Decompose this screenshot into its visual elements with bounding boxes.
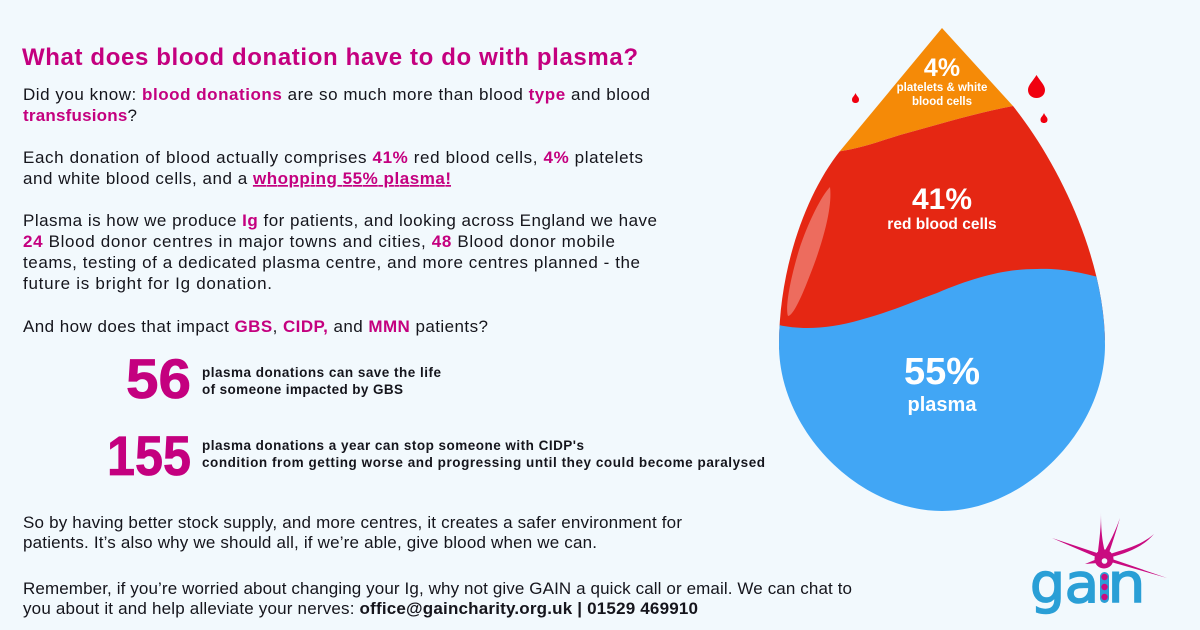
- label: 55%: [904, 351, 980, 416]
- logo: gain: a: [1065, 552, 1099, 615]
- icon: small blood droplet left: [852, 93, 859, 103]
- stat: 56 donations: of someone impacted by GBS: [202, 382, 403, 397]
- highlight: [787, 187, 830, 316]
- text block: plasma and Ig: [23, 211, 657, 293]
- text block: plasma and Ig: future is bright for Ig donation.: [23, 274, 272, 293]
- text block: stock supply: patients. It’s also why we should all, if we’re able, give blood when we can.: [23, 533, 597, 552]
- text block: composition of a donation: [23, 148, 643, 188]
- text block: contact: you about it and help alleviate your nerves: office@gaincharity.org.uk | 01529 469910: [23, 599, 698, 618]
- icon: small blood droplet right: [1040, 113, 1048, 123]
- logo: gain: [1030, 512, 1167, 615]
- text block: composition of a donation: and white blood cells, and a whopping 55% plasma!: [23, 169, 451, 188]
- label: 41%: [887, 183, 997, 233]
- label: 55%: plasma: [908, 394, 977, 416]
- stat: 155 donations: plasma donations a year can stop someone with CIDP's: [202, 438, 584, 453]
- logo: gain: n: [1108, 552, 1146, 615]
- stat: 56 donations: plasma donations can save the life: [202, 365, 441, 380]
- chart: blood drop: [779, 28, 1105, 511]
- text block: did you know: transfusions?: [23, 106, 137, 125]
- segment: red 41%: [779, 106, 1105, 350]
- logo neuron: [1052, 512, 1167, 578]
- stat: 155 donations: condition from getting worse and progressing until they could become paralysed: [202, 455, 765, 470]
- stat: 56 donations: [126, 347, 441, 410]
- label: 4%: blood cells: [912, 96, 972, 108]
- text block: contact: Remember, if you’re worried about changing your Ig, why not give GAIN a quick call or email. We can chat to: [23, 579, 852, 598]
- segment: orange 4%: [840, 28, 1013, 152]
- icon: large blood droplet: [1028, 75, 1045, 98]
- text block: composition of a donation: Each donation of blood actually comprises 41% red blood cells, 4% platelets: [23, 148, 643, 167]
- title: What does blood donation have to do with plasma?: [22, 44, 638, 71]
- label: 55%: 55%: [904, 351, 980, 393]
- logo wordmark: g: [1030, 552, 1065, 615]
- stat: 155 donations: [107, 424, 765, 487]
- label: 41%: red blood cells: [887, 216, 997, 233]
- text block: plasma and Ig: teams, testing of a dedicated plasma centre, and more centres planned - the: [23, 253, 640, 272]
- text block: stock supply: So by having better stock supply, and more centres, it creates a safer environment for: [23, 513, 682, 532]
- label: 4%: 4%: [924, 54, 960, 82]
- stat: 155 donations: 155: [107, 424, 191, 487]
- text block: did you know: Did you know: blood donations are so much more than blood type and blood: [23, 85, 650, 104]
- label: 4%: [897, 54, 987, 108]
- text block: did you know: [23, 85, 650, 125]
- stat: 56 donations: 56: [126, 347, 191, 410]
- text block: plasma and Ig: 24 Blood donor centres in major towns and cities, 48 Blood donor mobile: [23, 232, 615, 251]
- segment: blue 55%: [779, 268, 1105, 511]
- text block: plasma and Ig: Plasma is how we produce Ig for patients, and looking across England we have: [23, 211, 657, 230]
- text block: patient question: And how does that impact GBS, CIDP, and MMN patients?: [23, 317, 488, 336]
- text block: contact: [23, 579, 852, 618]
- label: 41%: 41%: [912, 183, 972, 216]
- text block: stock supply: [23, 513, 682, 552]
- label: 4%: platelets & white: [897, 82, 987, 94]
